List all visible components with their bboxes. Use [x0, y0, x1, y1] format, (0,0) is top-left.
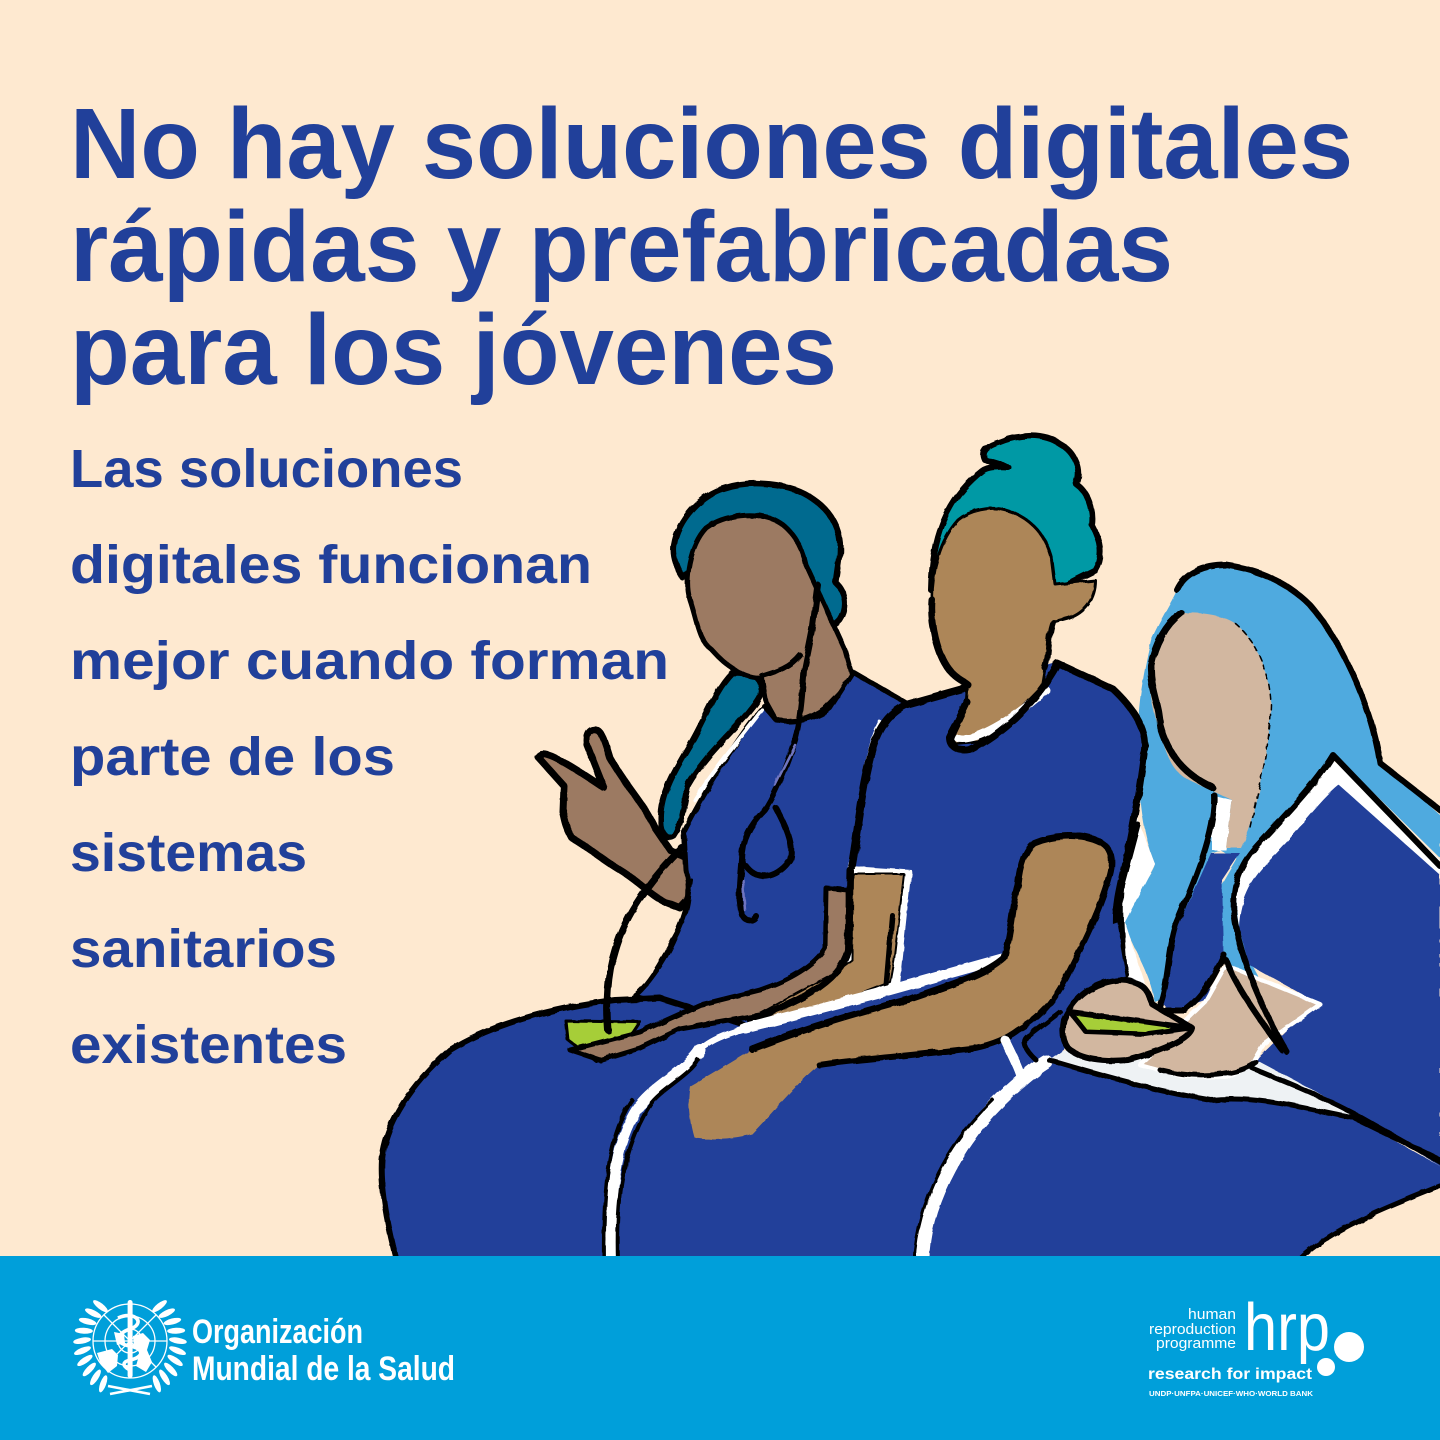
figure: middle woman, far arm [748, 862, 912, 1020]
figure: middle woman, lap [604, 922, 1130, 1262]
figure: woman on the left, top and lap [382, 672, 915, 1262]
subtitle text block: mejor cuando forman [70, 631, 669, 691]
subtitle text block: existentes [70, 1015, 347, 1075]
figure: woman on the left, forearm and earphone cable [570, 585, 850, 1060]
subtitle text block: digitales funcionan [70, 535, 592, 595]
logo: HRP research for impact: hrp [1244, 1290, 1330, 1365]
figure: middle woman, hair and head [931, 436, 1100, 750]
logo: WHO emblem [73, 1298, 187, 1394]
figure: middle woman, top [850, 663, 1145, 1034]
subtitle text block: sanitarios [70, 919, 337, 979]
title [70, 88, 1353, 406]
figure: woman on the right, lap [914, 1040, 1440, 1262]
subtitle text block: parte de los [70, 727, 395, 787]
figure: woman on the right, hand with phone [1025, 980, 1192, 1061]
logo: HRP research for impact: human [1188, 1306, 1236, 1323]
subtitle text block [70, 439, 669, 1075]
logo text: Organización Mundial de la Salud [192, 1313, 455, 1388]
figure: woman on the left, raised hand [538, 729, 692, 908]
icon: phone held by the woman on the left [566, 1021, 640, 1061]
logo: HRP research for impact: programme [1156, 1335, 1236, 1352]
footer band [0, 1256, 1440, 1440]
logo: HRP research for impact: reproduction [1149, 1321, 1236, 1338]
subtitle text block: sistemas [70, 823, 307, 883]
title: para los jóvenes [70, 294, 837, 406]
figure: woman on the right, hair and top [1030, 565, 1440, 1166]
subtitle text block: Las soluciones [70, 439, 463, 499]
logo: HRP research for impact [1148, 1290, 1364, 1398]
title: rápidas y prefabricadas [70, 191, 1173, 303]
logo: HRP research for impact: research for impact [1148, 1366, 1313, 1383]
logo text: Organización Mundial de la Salud: Mundial de la Salud [192, 1350, 455, 1388]
title: No hay soluciones digitales [70, 88, 1353, 200]
logo: HRP research for impact: UNDP·UNFPA·UNICEF·WHO·WORLD BANK [1149, 1389, 1314, 1398]
figure: middle woman, near arm [689, 836, 1112, 1139]
illustration: three young women looking at phones [382, 436, 1440, 1262]
figure: woman on the left, hair and head [661, 483, 853, 837]
logo text: Organización Mundial de la Salud: Organización [192, 1313, 363, 1351]
